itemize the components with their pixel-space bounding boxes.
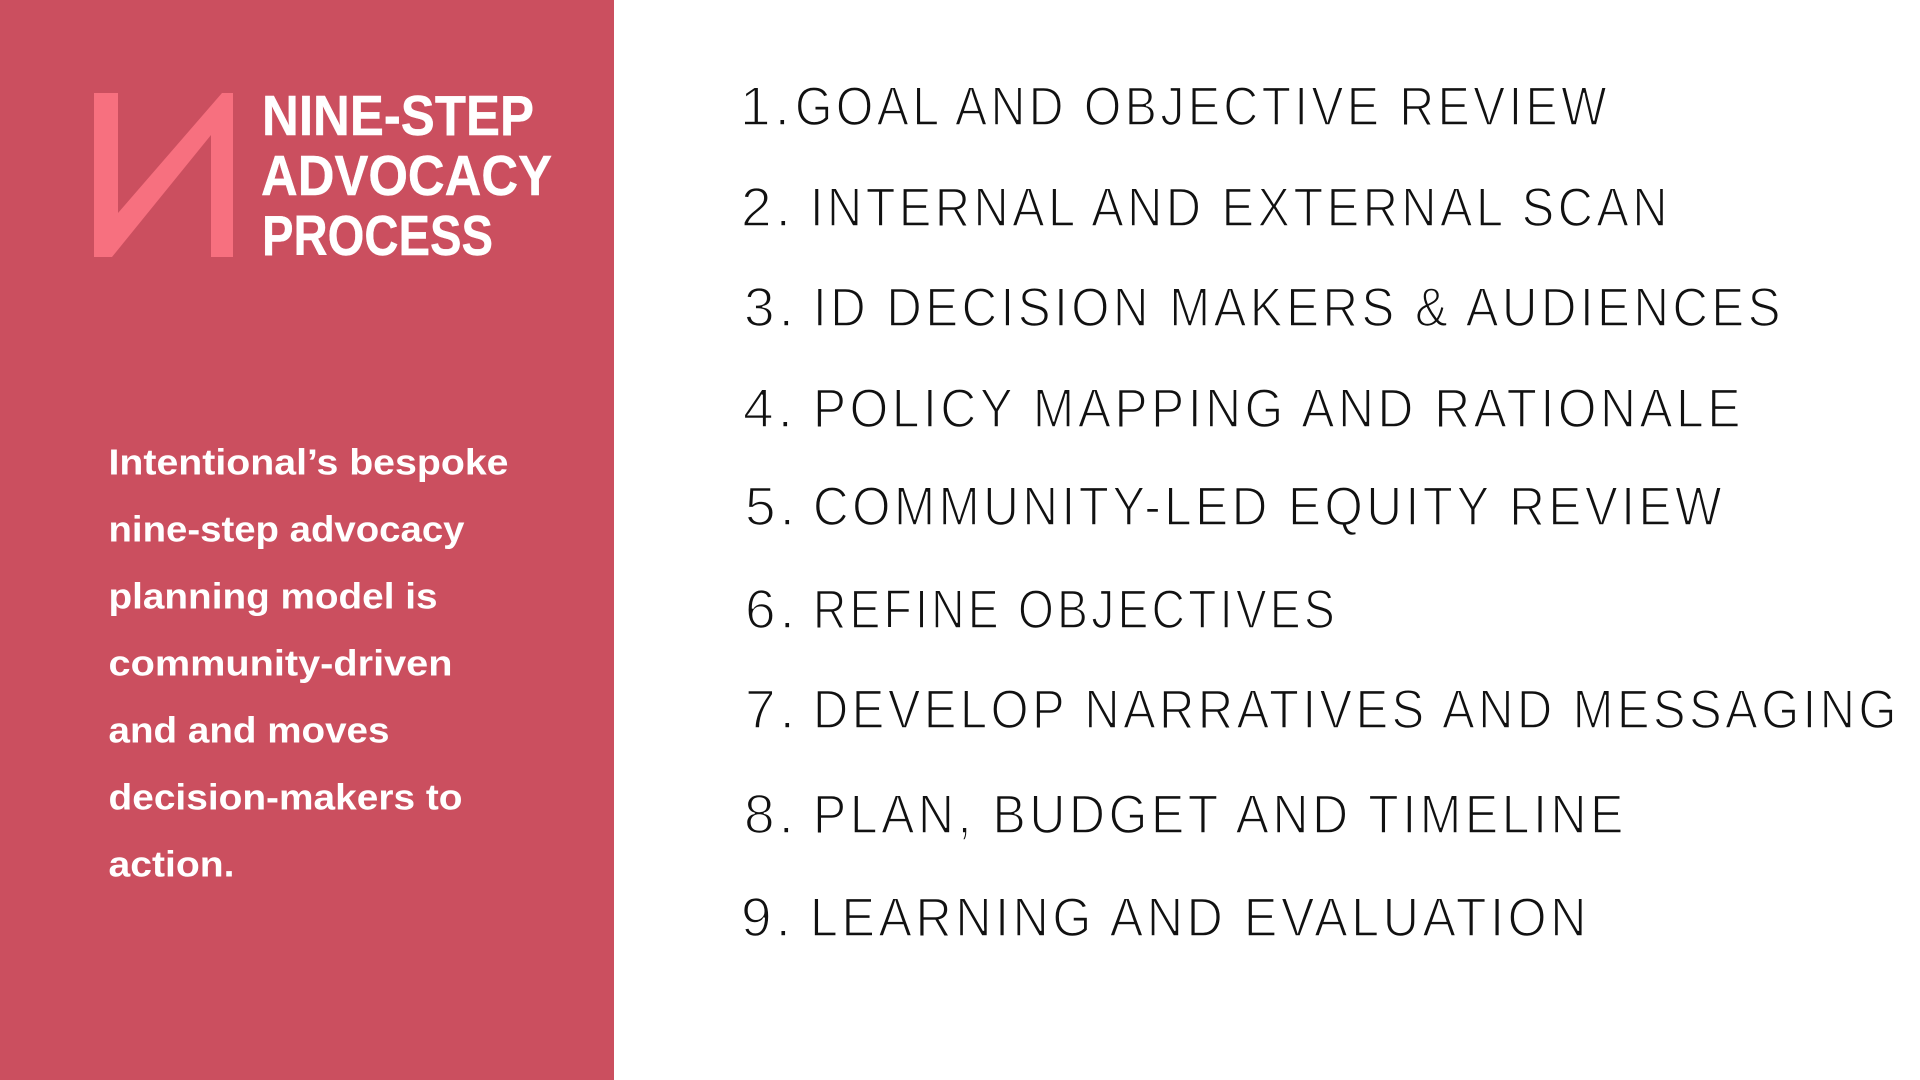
step 3: 3. (744, 276, 798, 338)
step 5: COMMUNITY-LED EQUITY REVIEW (813, 475, 1725, 537)
text block: description: and and moves (108, 710, 390, 750)
step 4: 4. (743, 377, 797, 439)
text block: description: nine-step advocacy (108, 508, 464, 550)
text block: description (108, 442, 508, 884)
step 7: 7. (745, 678, 799, 740)
step 9: LEARNING AND EVALUATION (810, 886, 1590, 948)
list: nine steps (740, 75, 1900, 948)
step 9: 9. (741, 886, 795, 948)
text block: description: action. (108, 844, 234, 884)
title: NINE-STEP (262, 84, 534, 148)
step 2: INTERNAL AND EXTERNAL SCAN (810, 176, 1671, 238)
step 5: 5. (745, 475, 799, 537)
step 8: PLAN, BUDGET AND TIMELINE (813, 783, 1627, 845)
step 1: 1. (740, 75, 794, 137)
text block: description: Intentional’s bespoke (108, 442, 508, 482)
panel: left sidebar (0, 0, 614, 1080)
text block: description: community-driven (108, 642, 452, 684)
step 8: 8. (744, 783, 798, 845)
step 6: REFINE OBJECTIVES (813, 578, 1338, 640)
icon: stylised N logo (94, 93, 233, 257)
title: PROCESS (262, 204, 493, 268)
title: ADVOCACY (261, 144, 552, 208)
text block: description: planning model is (108, 576, 438, 616)
step 4: POLICY MAPPING AND RATIONALE (813, 377, 1744, 439)
step 6: 6. (745, 578, 799, 640)
title (261, 84, 552, 268)
step 1: GOAL AND OBJECTIVE REVIEW (795, 75, 1610, 137)
step 2: 2. (741, 176, 795, 238)
step 3: ID DECISION MAKERS & AUDIENCES (813, 276, 1784, 338)
text block: description: decision-makers to (108, 776, 462, 818)
